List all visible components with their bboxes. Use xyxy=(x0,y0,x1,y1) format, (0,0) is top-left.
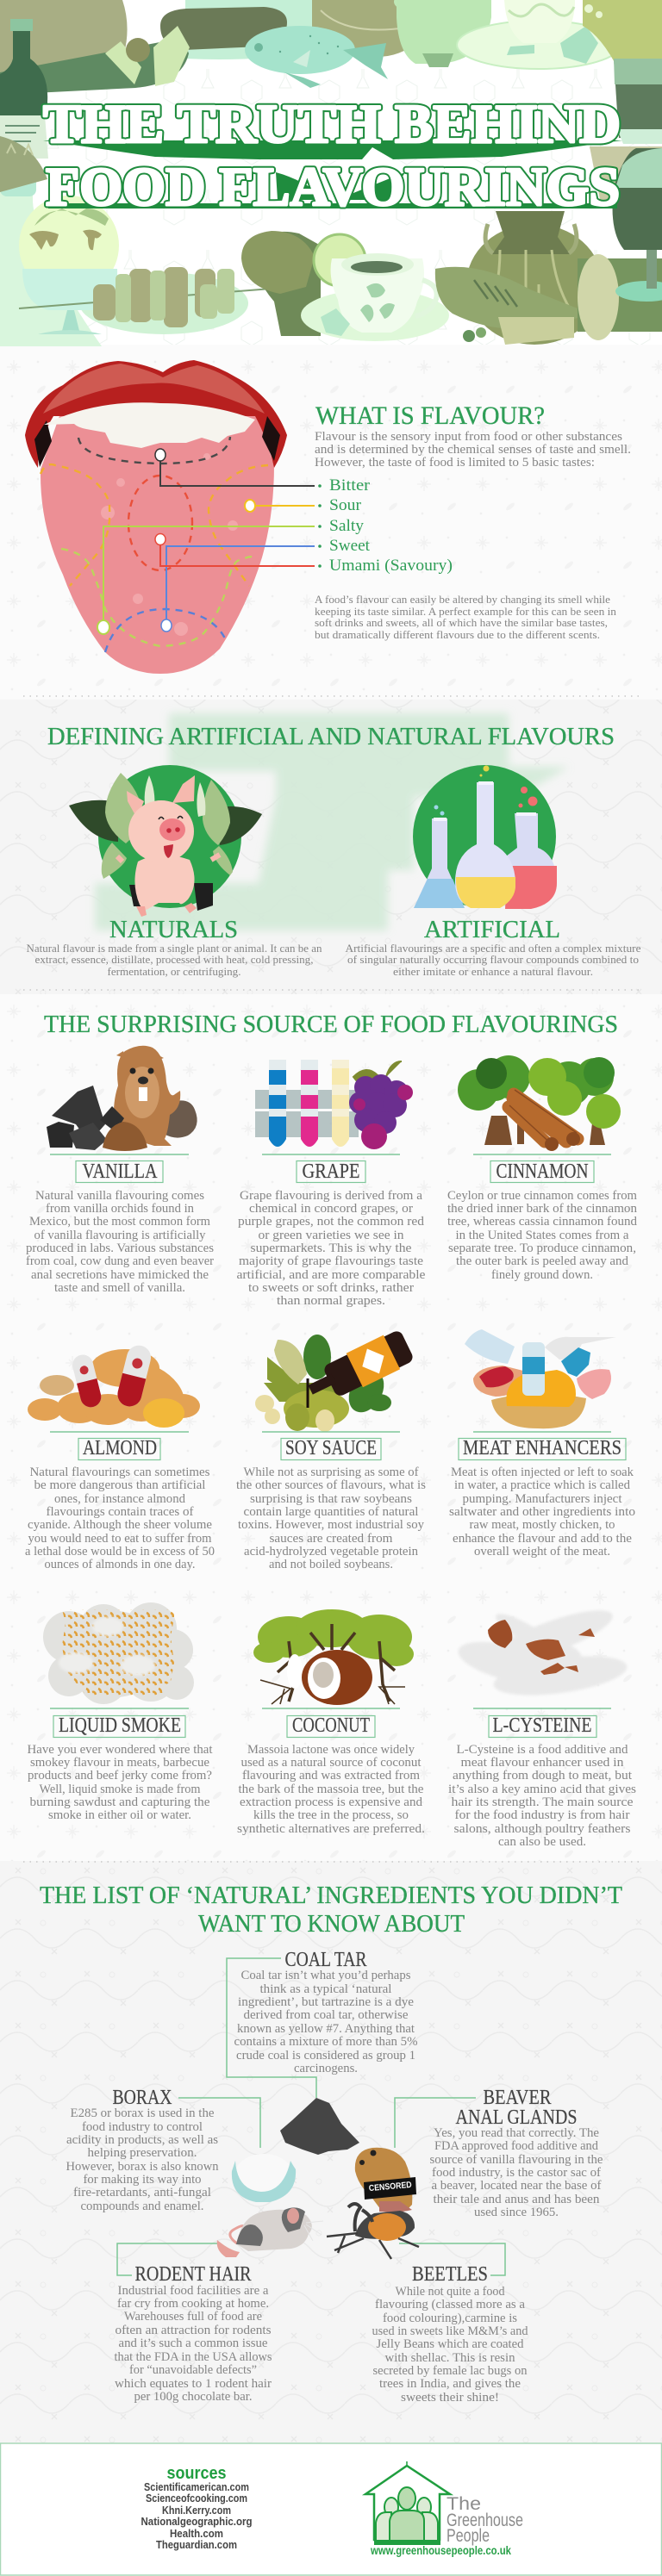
panel: vanilla: Mexico, but the most common form xyxy=(29,1215,210,1229)
panel: borax: for making its way into xyxy=(83,2173,202,2187)
panel: cinnamon: finely ground down. xyxy=(491,1268,593,1282)
panel: coconut: Massoia lactone was once widely xyxy=(247,1743,415,1757)
panel: vanilla: from coal, cow dung and even beaver xyxy=(26,1254,214,1268)
heading: list of natural ingredients: WANT TO KNOW ABOUT xyxy=(198,1911,465,1938)
title: FOOD FLAVOURINGS xyxy=(46,156,620,217)
panel: coconut: flavouring and was extracted from xyxy=(242,1769,420,1783)
panel: beetles xyxy=(372,2263,528,2405)
panel: almond: cyanide. Although the sheer volume xyxy=(28,1518,212,1532)
panel: borax: acidity in products, as well as xyxy=(66,2133,218,2147)
panel: beetles: secreted by female lac bugs on xyxy=(372,2364,528,2378)
panel: beetles: food colouring),carmine is xyxy=(383,2312,517,2325)
panel: beetles: used in sweets like M&M’s and xyxy=(372,2324,528,2338)
panel: what is flavour: Sour xyxy=(329,496,362,514)
panel: rodent hair: that the FDA in the USA allows xyxy=(114,2350,272,2364)
panel: beaver anal glands: Yes, you read that correctly. The xyxy=(434,2126,599,2140)
heading: list of natural ingredients: THE LIST OF ‘NATURAL’ INGREDIENTS YOU DIDN’T xyxy=(40,1882,622,1909)
panel: beetles: sweets their shine! xyxy=(401,2391,499,2405)
panel: liquid smoke: smoke in either oil or water. xyxy=(48,1808,191,1822)
panel: beaver anal glands: their tale and anus and has been xyxy=(433,2193,600,2206)
panel: rodent hair: far cry from cooking at home. xyxy=(117,2297,269,2311)
header: bottom food illustration xyxy=(0,136,662,346)
panel: coal tar: Coal tar isn’t what you’d perhaps xyxy=(241,1969,411,1982)
panel: grape: artificial, and are more comparable xyxy=(236,1268,426,1282)
panel: beaver anal glands: a beaver, located near the base of xyxy=(431,2179,602,2193)
icon: feathers and hair xyxy=(454,1600,629,1702)
panel: coal tar: carcinogens. xyxy=(294,2062,358,2075)
panel: grape: GRAPE xyxy=(302,1160,360,1183)
panel: rodent hair: Industrial food facilities are a xyxy=(117,2284,269,2298)
panel: meat enhancers: in water, a practice which is called xyxy=(454,1478,630,1492)
panel: cinnamon: separate tree. To produce cinnamon, xyxy=(448,1241,636,1255)
panel: soy sauce: While not as surprising as some of xyxy=(243,1465,419,1479)
panel: l-cysteine: hair its strength. The main source xyxy=(452,1795,634,1809)
logo: the greenhouse people: Greenhouse xyxy=(447,2511,523,2530)
panel: beetles: with shellac. This is resin xyxy=(384,2351,515,2365)
panel: coal tar: COAL TAR xyxy=(284,1949,367,1971)
panel: cinnamon: CINNAMON xyxy=(496,1160,588,1183)
panel: beaver anal glands: BEAVER xyxy=(483,2087,552,2109)
panel: what is flavour: Flavour is the sensory input from food or other substances xyxy=(315,430,622,444)
panel: beetles: BEETLES xyxy=(412,2263,488,2286)
panel: cinnamon xyxy=(447,1055,637,1282)
panel: naturals: fermentation, or centrifuging. xyxy=(107,965,241,978)
panel: vanilla xyxy=(26,1046,214,1295)
heading: list of natural ingredients xyxy=(40,1882,622,1938)
panel: grape: than normal grapes. xyxy=(277,1294,385,1308)
icon: test tubes and grapes xyxy=(255,1060,413,1149)
panel: beaver anal glands xyxy=(429,2087,603,2219)
panel: meat enhancers: saltwater and other ingredients into xyxy=(449,1505,635,1519)
panel: grape: chemical in concord grapes, or xyxy=(249,1202,413,1216)
panel: rodent hair: RODENT HAIR xyxy=(134,2263,252,2286)
panel: meat enhancers: MEAT ENHANCERS xyxy=(463,1437,621,1459)
panel: coconut: COCONUT xyxy=(292,1714,370,1737)
title: FOOD FLAVOURINGS xyxy=(46,156,620,217)
panel: what is flavour: but dramatically different flavours due to the different scents. xyxy=(315,628,600,641)
panel: beetles: While not quite a food xyxy=(395,2285,505,2299)
panel: vanilla: anal secretions have mimicked the xyxy=(31,1268,209,1282)
panel: borax: BORAX xyxy=(112,2087,172,2109)
panel: almond: ounces of almonds in one day. xyxy=(45,1558,195,1571)
panel: borax: E285 or borax is used in the xyxy=(71,2106,215,2120)
panel: coal tar: derived from coal tar, otherwise xyxy=(243,2008,409,2022)
panel: vanilla: VANILLA xyxy=(83,1160,158,1183)
panel: artificial: either imitate or enhance a natural flavour. xyxy=(393,965,593,978)
title xyxy=(43,93,622,217)
panel: what is flavour: Umami (Savoury) xyxy=(329,557,453,575)
panel: rodent hair xyxy=(114,2263,272,2404)
panel: artificial: ARTIFICIAL xyxy=(424,916,560,943)
panel: vanilla: produced in labs. Various substances xyxy=(26,1241,214,1255)
panel: borax: helping preservation. xyxy=(88,2146,197,2160)
heading: surprising source of food flavourings: THE SURPRISING SOURCE OF FOOD FLAVOURINGS xyxy=(44,1011,618,1038)
icon: bowl of borax xyxy=(232,2154,296,2202)
heading: defining artificial and natural flavours: DEFINING ARTIFICIAL AND NATURAL FLAVOURS xyxy=(47,724,615,750)
panel: grape xyxy=(236,1060,426,1308)
panel: grape: majority of grape flavourings taste xyxy=(239,1254,423,1268)
panel: coal tar: contains a mixture of more than 5% xyxy=(234,2035,417,2049)
icon: almonds and poison capsules xyxy=(28,1343,200,1428)
panel: beaver anal glands: ANAL GLANDS xyxy=(455,2106,578,2129)
sources list: Scientificamerican.com xyxy=(144,2480,249,2493)
panel: vanilla: Natural vanilla flavouring comes xyxy=(35,1189,204,1203)
sources list xyxy=(141,2464,253,2551)
panel: what is flavour xyxy=(315,401,631,641)
panel: rodent hair: often an attraction for rodents xyxy=(116,2324,272,2337)
panel: borax: However, borax is also known xyxy=(66,2160,219,2174)
panel: naturals xyxy=(26,916,322,978)
icon: censored beaver: CENSORED xyxy=(368,2181,412,2193)
panel: liquid smoke: products and beef jerky come from? xyxy=(28,1769,212,1783)
panel: l-cysteine: meat flavour enhancer used in xyxy=(460,1756,624,1770)
panel: soy sauce: and not boiled soybeans. xyxy=(269,1558,393,1571)
panel: almond xyxy=(25,1343,215,1571)
panel: beaver anal glands: food industry, is the castor sac of xyxy=(432,2166,601,2180)
panel: soy sauce: SOY SAUCE xyxy=(285,1437,377,1459)
panel: beetles: flavouring (classed more as a xyxy=(375,2298,525,2312)
panel: cinnamon: the outer bark is peeled away and xyxy=(456,1254,628,1268)
sources list: Theguardian.com xyxy=(156,2538,237,2551)
panel: rodent hair: which equates to 1 rodent hair xyxy=(115,2377,272,2391)
panel: grape: to sweets or soft drinks, rather xyxy=(248,1281,414,1295)
panel: liquid smoke: LIQUID SMOKE xyxy=(59,1714,181,1737)
icon: laboratory flasks xyxy=(413,765,557,909)
panel: what is flavour: Salty xyxy=(329,517,365,535)
icon: censored beaver xyxy=(355,2148,416,2212)
icon: bowl of meat, salt and water xyxy=(465,1329,616,1428)
panel: soy sauce: acid-hydrolyzed vegetable protein xyxy=(244,1545,418,1559)
logo: the greenhouse people xyxy=(365,2461,523,2557)
panel: l-cysteine: L-CYSTEINE xyxy=(493,1714,591,1737)
panel: meat enhancers: Meat is often injected or left to soak xyxy=(451,1465,634,1479)
sources list: Health.com xyxy=(170,2527,223,2540)
panel: cinnamon: in the United States comes from a xyxy=(455,1229,629,1242)
panel: rodent hair: per 100g chocolate bar. xyxy=(134,2390,252,2404)
panel: cinnamon: tree, whereas cassia cinnamon found xyxy=(447,1215,637,1229)
panel: l-cysteine: salons, although poultry feathers xyxy=(453,1822,631,1836)
sources list: Scienceofcooking.com xyxy=(146,2492,247,2504)
panel: beaver anal glands: source of vanilla flavouring in the xyxy=(429,2153,603,2167)
panel: liquid smoke: burning sawdust and capturing the xyxy=(29,1795,210,1809)
panel: grape: purple grapes, not the common red xyxy=(238,1215,425,1229)
footer panel xyxy=(0,2443,662,2575)
panel: vanilla: from vanilla orchids found in xyxy=(46,1202,194,1216)
panel: grape: supermarkets. This is why the xyxy=(250,1241,412,1255)
panel: coal tar: ingredient’, but tartrazine is a dye xyxy=(238,1995,414,2009)
panel: almond: be more dangerous than artificial xyxy=(34,1478,205,1492)
logo: the greenhouse people: www.greenhousepeople.co.uk xyxy=(370,2543,511,2557)
panel: meat enhancers: enhance the flavour and add to the xyxy=(453,1532,632,1546)
panel: what is flavour: However, the taste of food is limited to 5 basic tastes: xyxy=(315,456,595,470)
panel: almond: a lethal dose would be in excess of 50 xyxy=(25,1545,215,1559)
panel: coconut: kills the tree in the process, so xyxy=(253,1808,409,1822)
panel: beetles: trees in India, and gives the xyxy=(379,2377,521,2391)
panel: almond: flavourings contain traces of xyxy=(47,1505,193,1519)
panel: beaver anal glands: FDA approved food additive and xyxy=(434,2139,598,2153)
panel: grape: or green varieties we see in xyxy=(259,1229,404,1242)
icon: coal lump xyxy=(280,2098,359,2155)
panel: beetles: Jelly Beans which are coated xyxy=(376,2337,524,2351)
panel: l-cysteine: anything from dough to meat, but xyxy=(453,1769,633,1783)
icon: pig with leaves xyxy=(69,765,262,917)
panel: coal tar: crude coal is considered as group 1 xyxy=(236,2049,415,2063)
panel: rodent hair: and it’s such a common issue xyxy=(119,2336,268,2350)
panel: artificial xyxy=(345,916,641,978)
panel: meat enhancers: overall weight of the meat. xyxy=(474,1545,610,1559)
panel: soy sauce: contain large quantities of natural xyxy=(243,1505,419,1519)
icon: coal and beaver xyxy=(47,1046,197,1151)
panel: l-cysteine xyxy=(448,1600,636,1849)
panel: what is flavour: WHAT IS FLAVOUR? xyxy=(315,401,545,430)
sources list: Khni.Kerry.com xyxy=(162,2504,231,2517)
panel: beaver anal glands: used since 1965. xyxy=(474,2206,559,2219)
panel: vanilla: of vanilla flavouring is artificially xyxy=(34,1229,206,1242)
panel: coal tar: known as yellow #7. Anything that xyxy=(237,2022,415,2036)
panel: coconut xyxy=(237,1609,425,1836)
logo: the greenhouse people: The xyxy=(447,2494,481,2514)
icon: trees and cinnamon sticks xyxy=(458,1055,621,1151)
panel: rodent hair: Warehouses full of food are xyxy=(124,2310,262,2324)
panel: naturals: Natural flavour is made from a single plant or animal. It can be an xyxy=(26,942,322,955)
panel: coconut: used as a natural source of coconut xyxy=(241,1756,422,1770)
panel: liquid smoke xyxy=(28,1602,213,1822)
panel: liquid smoke: Have you ever wondered where that xyxy=(28,1743,213,1757)
panel: rodent hair: for “unavoidable defects” xyxy=(129,2363,257,2377)
panel: meat enhancers: raw meat, mostly chicken, to xyxy=(469,1518,615,1532)
panel: naturals: NATURALS xyxy=(109,916,238,943)
panel: what is flavour: Bitter xyxy=(329,476,371,495)
panel: liquid smoke: Well, liquid smoke is made from xyxy=(40,1783,201,1796)
panel: coal tar xyxy=(234,1949,417,2075)
panel: almond: ones, for instance almond xyxy=(54,1492,185,1506)
green connector lines xyxy=(117,1958,505,2275)
sources list: sources xyxy=(167,2464,226,2483)
icon: massoia trees and coconut xyxy=(253,1609,414,1705)
icon: tongue and lips taste map xyxy=(25,360,315,674)
panel: artificial: of singular naturally occurring flavour compounds combined to xyxy=(347,953,639,966)
title: THE TRUTH BEHIND xyxy=(43,93,621,154)
panel: grape: Grape flavouring is derived from a xyxy=(240,1189,422,1203)
panel: almond: Natural flavourings can sometimes xyxy=(29,1465,210,1479)
panel: vanilla: taste and smell of vanilla. xyxy=(54,1281,185,1295)
header: top food illustration xyxy=(0,0,662,159)
panel: soy sauce: sauces are created from xyxy=(269,1532,393,1546)
panel: l-cysteine: it’s also a key amino acid that gives xyxy=(448,1783,636,1796)
panel: liquid smoke: smokey flavour in meats, barbecue xyxy=(30,1756,209,1770)
panel: meat enhancers: pumping. Manufacturers inject xyxy=(462,1492,622,1506)
panel: l-cysteine: can also be used. xyxy=(498,1835,586,1849)
panel: soy sauce: toxins. However, most industrial soy xyxy=(238,1518,424,1532)
panel: almond: ALMOND xyxy=(83,1437,157,1459)
logo: the greenhouse people: People xyxy=(447,2526,490,2546)
panel: what is flavour: Sweet xyxy=(329,537,371,555)
panel: coconut: synthetic alternatives are preferred. xyxy=(237,1822,425,1836)
panel: what is flavour: and is determined by the chemical senses of taste and smell. xyxy=(315,443,631,457)
icon: soy beans and sauce bottle xyxy=(255,1328,415,1432)
icon: rat xyxy=(217,2207,323,2257)
panel: meat enhancers xyxy=(449,1329,635,1559)
panel: naturals: extract, essence, distillate, processed with heat, cold pressing, xyxy=(34,953,314,966)
panel: soy sauce xyxy=(236,1328,426,1571)
panel: coconut: the bark of the massoia tree, but the xyxy=(238,1783,424,1796)
panel: borax: compounds and enamel. xyxy=(81,2200,203,2213)
panel: what is flavour: A food’s flavour can easily be altered by changing its smell while xyxy=(315,593,610,606)
title: THE TRUTH BEHIND xyxy=(43,93,621,154)
panel: borax: fire-retardants, anti-fungal xyxy=(73,2186,211,2200)
icon: smoke cloud with wood flecks xyxy=(43,1602,194,1704)
icon: beetle xyxy=(327,2204,419,2259)
panel: borax xyxy=(66,2087,219,2213)
panel: almond: you would need to eat to suffer from xyxy=(28,1532,212,1546)
panel: cinnamon: Ceylon or true cinnamon comes from xyxy=(447,1189,637,1203)
panel: what is flavour: keeping its taste similar. A perfect example for this can be seen in xyxy=(315,605,617,618)
watermark behind defining section xyxy=(95,713,569,930)
panel: what is flavour: soft drinks and sweets, all of which have the similar base tastes, xyxy=(315,616,608,629)
panel: artificial: Artificial flavourings are a specific and often a complex mixture xyxy=(345,942,641,955)
panel: borax: food industry to control xyxy=(82,2120,203,2134)
panel: l-cysteine: L-Cysteine is a food additive and xyxy=(457,1743,628,1757)
panel: cinnamon: the dried inner bark of the cinnamon xyxy=(447,1202,637,1216)
panel: coal tar: think as a typical ‘natural xyxy=(260,1982,391,1996)
panel: coconut: extraction process is expensive and xyxy=(240,1795,422,1809)
panel: soy sauce: the other sources of flavours, what is xyxy=(236,1478,426,1492)
panel: l-cysteine: for the food industry is from hair xyxy=(455,1808,629,1822)
panel: soy sauce: surprising is that raw soybeans xyxy=(250,1492,412,1506)
sources list: Nationalgeographic.org xyxy=(141,2515,253,2528)
